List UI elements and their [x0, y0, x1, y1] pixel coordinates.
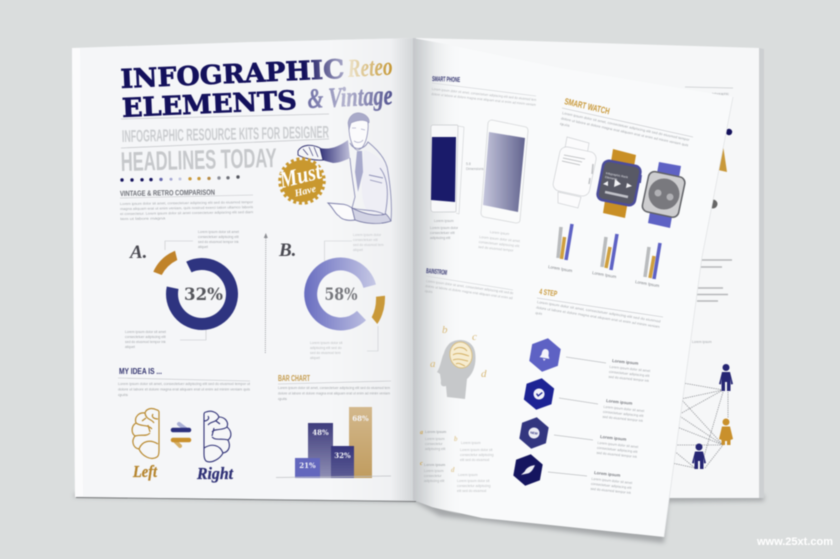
text block top A: sed do eiusmod tempor ink	[198, 240, 239, 244]
text block: brainstorm b	[454, 435, 494, 462]
text block: brainstorm d: d	[451, 466, 455, 474]
text block: my idea: quis	[118, 393, 128, 397]
media controls	[603, 179, 632, 188]
donut ring A	[172, 264, 232, 324]
labels for mini bars: Lorem Ipsum	[635, 279, 660, 288]
4 step rule	[537, 298, 663, 317]
title: INFOGRAPHIC	[120, 55, 345, 95]
text block: brainstorm c: adipiscing elit	[424, 479, 444, 483]
heading: vintage and retro comparison: VINTAGE & RETRO COMPARISON	[120, 188, 215, 198]
text block: my idea: Lorem ipsum dolor sit amet, consectetuer adipiscing elit sed do eiusmod tempor ut	[118, 382, 250, 386]
back page peek: dots and lines	[685, 87, 733, 344]
bar labels: 68%	[352, 414, 369, 423]
heading: 4 step: 4 STEP	[539, 287, 558, 299]
phone one screen	[431, 137, 456, 202]
front page edge	[664, 97, 733, 537]
text block: step 3: Lorem ipsum dolor sit amet	[597, 441, 638, 449]
letters around head: b	[442, 324, 448, 336]
text block: step 3: consectetuer adipiscing elit	[597, 446, 638, 454]
text block: smart watch: Lorem ipsum dolor sit amet, consectetuer adipiscing elit sed do eiusmod tempor	[562, 111, 691, 142]
watch text	[605, 171, 629, 183]
text block: step 4: Lorem ipsum	[594, 470, 621, 478]
text block: brainstorm d: Lorem ipsum dolor sit	[457, 479, 489, 483]
text block: comparison: tem ut labore magna	[120, 216, 165, 221]
leader lines A	[165, 241, 206, 340]
phone one dimension bracket	[456, 126, 464, 214]
text block top B: aliquet	[353, 248, 363, 252]
text block: phone one	[430, 219, 459, 240]
bar chart rule	[278, 381, 391, 384]
bar labels: 21%	[299, 461, 316, 470]
bar chart	[276, 407, 391, 478]
bar labels: 48%	[312, 428, 329, 437]
back page peek: dots and lines: Lorem ipsum	[692, 340, 712, 344]
man: pointing hand	[328, 203, 355, 220]
step 1: bell hexagon	[528, 336, 562, 374]
comparison rule	[120, 195, 253, 198]
icon: head with brain	[437, 340, 476, 399]
text block: 4 step: dolore ut labore et dolore magna erat aliquam erat ut enim ad minim veniam	[536, 305, 660, 329]
panel: front folded page	[416, 38, 733, 537]
text block top B: sed do eiusmod tem	[353, 243, 384, 247]
text block: smart watch: quis	[560, 122, 571, 128]
text block bottom A: consectetuer adipiscing elit	[125, 335, 166, 339]
title	[120, 55, 346, 124]
text block: phone one: consectetuer elit	[430, 231, 455, 235]
text block: step 4	[590, 470, 633, 495]
text block: step 1	[608, 358, 651, 383]
text block: comparison: Lorem ipsum dolor sit amet, consectetuer adipiscing elit sed do eiusmod tempor	[120, 200, 254, 206]
panel: left page	[72, 38, 416, 502]
heading: my idea is: MY IDEA IS ...	[119, 367, 162, 376]
text block: comparison	[120, 200, 254, 221]
watermark: www.25xt.com	[756, 536, 833, 548]
text block: bar chart: Lorem ipsum dolor sit amet, consectetuer adipiscing elit sed do eiusmod tem	[278, 386, 390, 390]
label: phone size: 5.8	[466, 162, 471, 166]
text block: brainstorm a: Lorem ipsum	[425, 437, 445, 441]
panel: donut A	[125, 230, 239, 349]
man: arm holding badge	[320, 140, 350, 163]
text block: brainstorm: quis	[424, 289, 433, 294]
text block top B: consectetuer elit	[353, 238, 378, 242]
text block: step 1: Lorem ipsum dolor sit amet	[609, 365, 650, 373]
page shadow under magazine	[74, 494, 764, 543]
text block: brainstorm c: Lorem ipsum	[424, 463, 445, 467]
text block: phone two: sed do eiusmod tempor	[478, 245, 515, 253]
label: B: B.	[278, 240, 296, 261]
text block top A: consectetuer adipiscing elit	[198, 235, 239, 239]
panel: donut B	[278, 233, 385, 360]
text block: brainstorm: dolore ut labore et dolore magna erat aliquam erat ut enim ad	[425, 284, 513, 300]
bar 68%	[349, 407, 372, 478]
step 4: rocket hexagon	[512, 452, 544, 488]
dotted vertical divider with arrow	[264, 233, 268, 354]
watch text: Elements	[605, 175, 618, 181]
text block: brainstorm d: consectetur adipiscing	[457, 484, 491, 488]
heading: bar chart: BAR CHART	[278, 374, 310, 383]
letters around head: d	[481, 368, 487, 380]
bar 48%	[308, 423, 333, 478]
caption: Left: Left	[132, 462, 158, 481]
connector lines for steps	[548, 357, 606, 476]
labels for mini bars: Lorem Ipsum	[592, 270, 617, 279]
text block: step 1: consectetuer adipiscing elit	[609, 370, 650, 378]
leader lines B	[324, 241, 378, 351]
text block: bar chart: quis	[278, 397, 287, 401]
mini bars group one	[558, 224, 572, 260]
man: head and hair	[349, 115, 368, 150]
icon: swap arrows	[173, 424, 189, 446]
text block: comparison: magna aliquam erat ut enim veniam, quis nostrud exerci tation ullamco laboris	[120, 205, 253, 211]
text block: brainstorm	[424, 279, 514, 305]
text block: brainstorm b: b	[454, 435, 458, 443]
man: fingers	[303, 147, 318, 157]
brainstorm rule	[426, 276, 513, 290]
text block: brainstorm b: consectetur adipiscing	[460, 453, 494, 457]
text block: brainstorm b: Lorem ipsum dolor sit	[460, 448, 492, 452]
icon: person navy top	[719, 364, 733, 391]
man: hair	[348, 113, 369, 130]
man: cuff and hand	[298, 145, 323, 160]
text block bottom A: sed do eiusmod tempor ink	[125, 340, 166, 344]
text block top A: Lorem ipsum dolor sit amet	[198, 230, 239, 234]
text block: brainstorm: Lorem ipsum dolor sit amet, consectetuer adipiscing elit sed do	[426, 279, 514, 295]
text block: 4 step: Lorem ipsum dolor sit amet, consectetuer adipiscing elit sed do eiusmod	[537, 300, 661, 324]
text block: bar chart	[278, 386, 390, 401]
heading: smart watch: SMART WATCH	[564, 96, 611, 116]
text block: brainstorm a: adipiscing elit	[425, 447, 445, 451]
icon: purple band watch	[641, 162, 686, 228]
text block bottom A	[125, 330, 166, 349]
text block: step 2: Lorem ipsum	[606, 398, 633, 406]
bar 21%	[295, 458, 320, 478]
text block: step 4: consectetuer adipiscing elit	[591, 482, 632, 490]
text block: my idea: dolore ut labore et dolore magna erat aliquam erat ut enim ad minim veniam quis	[118, 388, 250, 392]
colour dots row	[120, 175, 240, 182]
phone two screen	[483, 132, 525, 212]
text block: brainstorm d	[451, 466, 491, 493]
text block: smart watch	[560, 111, 691, 153]
text block: brainstorm d: elit sed do eiusmod	[457, 489, 486, 493]
text block top B	[353, 233, 384, 252]
back page peek: dots and lines: Infographic	[712, 92, 729, 96]
text block bottom A: aliquet	[125, 345, 135, 349]
text block: brainstorm c: c	[420, 461, 423, 467]
text block: step 2	[602, 398, 645, 423]
text block: smart phone: Lorem ipsum dolor sit amet, consectetuer adipiscing elit sed do eiusmod tem	[432, 87, 537, 102]
text block: brainstorm c	[420, 461, 445, 483]
caption: Right: Right	[196, 464, 234, 483]
text block: phone two: consectetuer adipiscing elit	[479, 240, 520, 248]
subtitle rule	[121, 114, 329, 119]
headline rule	[121, 139, 329, 148]
text block: phone two	[478, 229, 521, 253]
text block: step 2: consectetuer adipiscing elit	[603, 410, 644, 418]
step 3: new hexagon: NEW	[530, 430, 538, 436]
network diagram with dotted lines	[672, 383, 728, 468]
man: jacket	[350, 142, 391, 221]
text block bottom B: Lorem ipsum dolor sit	[310, 341, 342, 345]
text block: brainstorm d: Lorem ipsum	[458, 473, 478, 477]
letters around head: a	[430, 358, 436, 370]
text block: brainstorm a: Lorem ipsum	[425, 430, 446, 434]
text block: brainstorm c: consectetur	[424, 474, 442, 478]
text block: phone one: Lorem ipsum dolor	[430, 226, 459, 230]
value 32%: 32%	[184, 285, 223, 305]
gold segment B	[372, 296, 385, 324]
text block: step 2: sed do eiusmod tempor ink	[602, 415, 643, 423]
labels for mini bars: Lorem Ipsum	[548, 264, 573, 273]
text block: step 4: sed do eiusmod tempor ink	[590, 487, 631, 495]
smart phone rule	[432, 83, 536, 96]
watch text: Infographic Rock	[605, 171, 629, 179]
text block: 4 step	[535, 300, 661, 334]
icon: phone two	[481, 120, 528, 223]
axis	[276, 476, 391, 478]
text block: brainstorm a: consectetur	[425, 442, 443, 446]
text block: step 3: Lorem ipsum	[600, 434, 627, 442]
icon: right brain	[204, 411, 231, 462]
step 3: new hexagon	[518, 415, 550, 451]
man: shirt and tie	[355, 151, 363, 192]
label: phone size	[466, 162, 484, 171]
text block top A: aliquet	[198, 245, 208, 249]
text block: my idea	[118, 382, 250, 397]
badge text: Have: Have	[293, 183, 318, 200]
text block: brainstorm b: Lorem ipsum	[461, 441, 481, 445]
label: A: A.	[129, 242, 147, 263]
value 58%: 58%	[324, 285, 358, 305]
icon: phone one	[431, 125, 464, 214]
badge: Must Have	[276, 158, 324, 203]
text block: step 1: Lorem ipsum	[612, 358, 639, 366]
text block top A	[198, 230, 239, 249]
spine shadow on front page	[413, 38, 462, 515]
mini bars group two	[602, 234, 617, 270]
text block bottom B: aliquet	[310, 356, 320, 360]
text block: smart watch: dolore ut labore et dolore magna erat aliquam erat ut enim ad minim veniam quis	[561, 116, 689, 147]
smart watch rule	[562, 108, 693, 137]
bar 32%	[331, 446, 354, 478]
text block: phone two: Lorem ipsum dolor sit amet	[479, 235, 520, 243]
icon: person gold	[719, 418, 733, 445]
letters around head	[430, 324, 487, 380]
illustration: retro man pointing	[298, 113, 391, 224]
text block: phone one: Lorem ipsum	[434, 219, 454, 223]
icon: gold band watch	[597, 149, 641, 218]
text block: brainstorm a	[420, 430, 446, 451]
labels for mini bars	[548, 264, 660, 288]
label: phone size: Dimensions	[466, 167, 484, 171]
bar labels	[299, 414, 369, 470]
mini bars group three	[645, 243, 660, 279]
icon: person navy bottom	[692, 444, 706, 469]
headline: HEADLINES TODAY	[120, 143, 277, 177]
text block: step 2: Lorem ipsum dolor sit amet	[603, 405, 644, 413]
text block: step 3: sed do eiusmod tempor ink	[596, 451, 637, 459]
text block: comparison: et consectetur. Lorem ipsum dolor sit amet consectetuer adipiscing elit sed diam	[120, 210, 253, 216]
man: jacket fill	[362, 150, 390, 215]
man: sleeve	[352, 208, 391, 224]
heading: brainstorm: BAINSTROM	[426, 268, 447, 277]
panel: back right page	[416, 38, 764, 500]
badge text: Must: Must	[276, 158, 324, 193]
text block bottom B: sed do eiusmod tem	[310, 351, 341, 355]
text block: brainstorm b: elit sed do eiusmod	[460, 458, 489, 462]
text block: phone two: Lorem ipsum	[490, 230, 510, 236]
heading: smart phone: SMART PHONE	[432, 76, 460, 84]
icon: left brain	[132, 409, 159, 458]
step 2: check hexagon	[522, 376, 556, 412]
text block: step 3	[596, 434, 639, 459]
donut ring B	[311, 264, 370, 324]
text block: smart phone: dolore ut labore et dolore magna erat aliquam erat ut enim ad minim veniam	[431, 92, 536, 107]
text block top B: Lorem ipsum dolor	[353, 233, 382, 237]
text block bottom A: Lorem ipsum dolor sit amet	[125, 330, 166, 334]
letters around head: c	[472, 331, 477, 343]
script title: & Vintage: & Vintage	[307, 80, 393, 115]
text block: step 1: sed do eiusmod tempor ink	[608, 375, 649, 383]
text block: brainstorm a: a	[420, 430, 423, 436]
script title: Reteo: Reteo	[346, 52, 393, 83]
gold segment A	[153, 251, 177, 275]
watch slider	[605, 192, 628, 197]
text block bottom B	[310, 341, 342, 360]
text block: 4 step: quis	[535, 311, 543, 316]
subtitle: INFOGRAPHIC RESOURCE KITS FOR DESIGNER	[122, 123, 329, 146]
icon: outline watch	[552, 137, 597, 208]
text block: phone one: adipiscing elit	[430, 236, 450, 240]
man: facial lines	[352, 128, 365, 142]
text block: step 4: Lorem ipsum dolor sit amet	[591, 477, 632, 485]
my idea rule	[118, 378, 250, 381]
text block bottom B: adipiscing elit sed do	[310, 346, 342, 350]
title: ELEMENTS	[121, 86, 297, 124]
text block: brainstorm c: Lorem ipsum	[424, 469, 444, 473]
bar labels: 32%	[334, 451, 351, 460]
text block: bar chart: dolore ut labore et dolore magna erat aliquam erat ut enim ad minim veniam	[278, 392, 390, 396]
